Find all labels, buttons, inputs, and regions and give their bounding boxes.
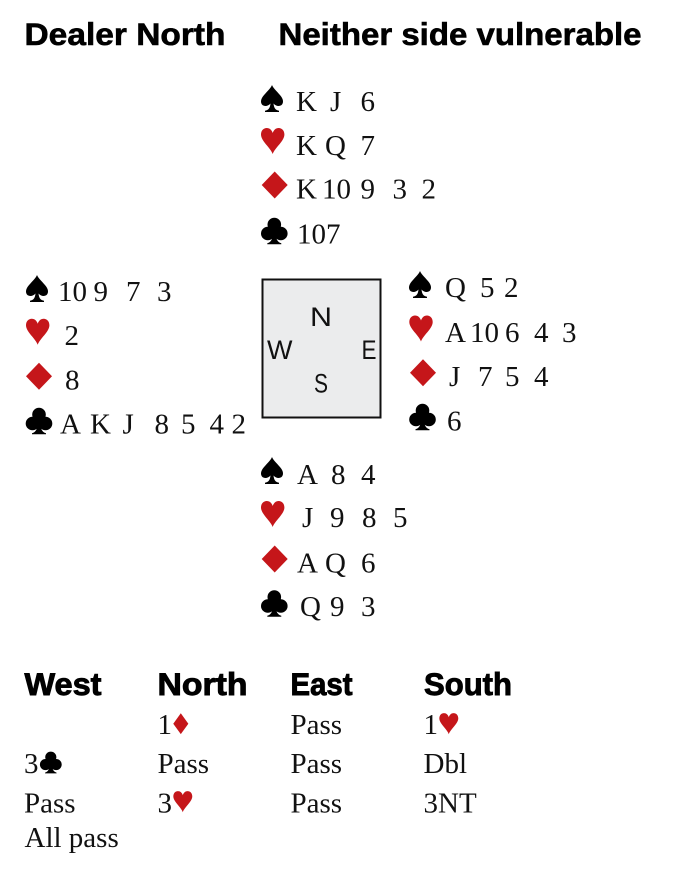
east spades row: Q	[445, 272, 466, 304]
north diamonds row: K	[296, 174, 317, 206]
label: west: W	[267, 335, 293, 365]
icon: heart	[261, 501, 284, 527]
south diamonds row	[262, 546, 376, 580]
south diamonds row: Q	[325, 548, 346, 580]
panel: south hand	[261, 457, 408, 623]
west diamonds row	[26, 363, 80, 396]
west spades row: 9	[94, 276, 108, 308]
south spades row: A	[297, 459, 318, 491]
west diamonds row: 8	[65, 364, 80, 396]
bid: east pass: Pass	[290, 788, 342, 820]
north diamonds row: 3	[392, 174, 407, 206]
north hearts row	[261, 128, 375, 162]
south clubs row: 9	[330, 591, 344, 623]
bid: south 3NT: 3NT	[424, 788, 477, 820]
south clubs row: Q	[300, 591, 321, 623]
icon: club	[261, 590, 288, 617]
north clubs row	[261, 218, 340, 250]
icon: spade	[261, 457, 283, 484]
south clubs row	[261, 590, 376, 623]
south diamonds row: 6	[361, 548, 376, 580]
west hearts row	[26, 319, 79, 352]
north diamonds row: 9	[360, 174, 375, 206]
east diamonds row: J	[449, 361, 460, 393]
icon: heart	[439, 713, 458, 734]
north clubs row: 107	[297, 218, 340, 250]
bid: east pass: Pass	[290, 748, 342, 780]
south spades row: 8	[331, 459, 346, 491]
bid: north 1 diamond	[158, 709, 188, 741]
panel: west hand	[26, 275, 246, 440]
north spades row: J	[330, 86, 341, 118]
east spades row: 2	[504, 272, 518, 304]
east hearts row: 10	[470, 317, 499, 349]
compass table	[262, 280, 380, 418]
icon: club	[26, 408, 52, 434]
east hearts row: 3	[562, 317, 576, 349]
north spades row: 6	[360, 86, 375, 118]
panel: auction table	[24, 666, 512, 854]
south hearts row: 5	[393, 502, 408, 534]
icon: club	[409, 404, 436, 430]
auction header: east: East	[290, 666, 353, 702]
icon: diamond	[262, 172, 288, 198]
auction header: north: North	[158, 666, 248, 702]
bid: west 3 clubs	[24, 748, 62, 780]
north hearts row: K	[296, 130, 317, 162]
south hearts row: 9	[330, 502, 344, 534]
icon: heart	[409, 316, 433, 342]
panel: north hand	[261, 85, 436, 250]
south hearts row: 8	[362, 502, 376, 534]
bid: north 3 hearts: 3	[158, 788, 172, 820]
south spades row	[261, 457, 376, 491]
bid: north 3 hearts	[158, 788, 192, 820]
auction header: west: West	[24, 666, 102, 702]
south spades row: 4	[361, 459, 376, 491]
bid: east pass: Pass	[290, 709, 342, 741]
east diamonds row: 7	[478, 361, 492, 393]
east diamonds row: 5	[505, 361, 520, 393]
east clubs row: 6	[447, 406, 462, 438]
panel: east hand	[409, 271, 576, 438]
label: east: E	[362, 335, 376, 365]
label: south: S	[314, 368, 328, 398]
west spades row: 3	[157, 276, 172, 308]
bid: north pass: Pass	[158, 748, 209, 780]
west clubs row: A	[60, 408, 81, 440]
west hearts row: 2	[64, 320, 79, 352]
east diamonds row: 4	[534, 361, 549, 393]
west clubs row: 8	[154, 408, 169, 440]
bid: west 3 clubs: 3	[24, 748, 38, 780]
east hearts row: 6	[505, 317, 520, 349]
west clubs row: 5	[181, 408, 196, 440]
bid: all pass: All pass	[24, 822, 119, 854]
bid: west pass: Pass	[24, 788, 76, 820]
east clubs row	[409, 404, 462, 438]
east hearts row: A	[445, 317, 466, 349]
west clubs row: 4	[210, 408, 224, 440]
east hearts row	[409, 316, 576, 349]
west clubs row: J	[122, 408, 134, 440]
icon: spade	[26, 275, 48, 302]
north hearts row: 7	[360, 130, 375, 162]
north diamonds row: 2	[422, 174, 436, 206]
east hearts row: 4	[534, 317, 549, 349]
south hearts row: J	[302, 502, 313, 534]
icon: diamond	[173, 713, 188, 734]
south diamonds row: A	[297, 548, 318, 580]
north hearts row: Q	[325, 130, 346, 162]
bid: south 1 heart: 1	[424, 709, 438, 741]
east spades row: 5	[480, 272, 494, 304]
icon: heart	[26, 319, 49, 345]
north diamonds row	[262, 172, 436, 206]
west clubs row: 2	[232, 408, 246, 440]
bid: south 1 heart	[424, 709, 458, 741]
icon: club	[40, 752, 62, 773]
east spades row	[409, 271, 518, 304]
west clubs row	[26, 408, 246, 440]
icon: spade	[261, 85, 283, 112]
heading: dealer: Dealer North	[24, 16, 226, 52]
south clubs row: 3	[361, 591, 376, 623]
north spades row	[261, 85, 375, 118]
west spades row	[26, 275, 172, 308]
bid: north 1 diamond: 1	[158, 709, 172, 741]
icon: heart	[261, 128, 284, 154]
label: north: N	[310, 302, 332, 332]
icon: spade	[409, 271, 431, 298]
auction header: south: South	[424, 666, 512, 702]
west clubs row: K	[90, 408, 111, 440]
east diamonds row	[410, 359, 549, 393]
heading: vulnerability: Neither side vulnerable	[278, 16, 642, 52]
icon: diamond	[262, 546, 288, 572]
icon: diamond	[26, 363, 52, 390]
icon: club	[261, 218, 288, 244]
bid: south double: Dbl	[424, 748, 467, 780]
icon: diamond	[410, 359, 436, 386]
north spades row: K	[296, 86, 317, 118]
icon: heart	[173, 791, 192, 812]
south hearts row	[261, 501, 408, 534]
north diamonds row: 10	[322, 174, 351, 206]
west spades row: 7	[126, 276, 140, 308]
west spades row: 10	[58, 276, 87, 308]
